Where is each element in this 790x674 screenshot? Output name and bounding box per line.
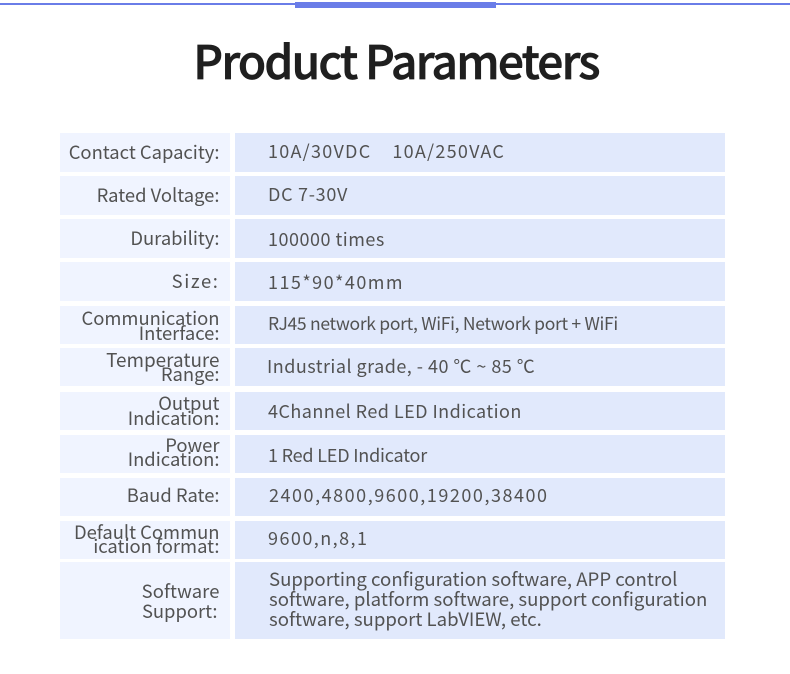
row: output indication: 4Channel Red LED Indication (268, 398, 522, 424)
row: communication interface (60, 305, 725, 346)
row: power indication (60, 432, 725, 473)
row: temperature range: Range: (161, 361, 220, 387)
row: default communication format: Default Commun (74, 519, 220, 545)
row: software support: Supporting configuration software, APP control (269, 565, 677, 592)
row: baud rate: Baud Rate: (127, 482, 220, 508)
row: default communication format: 9600,n,8,1 (268, 525, 368, 551)
row: rated voltage: DC 7-30V (268, 181, 348, 207)
row: output indication: Output (158, 390, 220, 416)
row: temperature range (60, 346, 725, 387)
row: default communication format (60, 519, 725, 559)
row: software support: software, platform software, support configuration (269, 585, 707, 612)
row: size: Size: (172, 268, 220, 294)
row: communication interface: Interface: (139, 320, 220, 346)
row: output indication (60, 390, 725, 431)
row: power indication: 1 Red LED Indicator (268, 442, 427, 468)
row: software support: software, support LabVIEW, etc. (269, 605, 542, 632)
row: software support: Support: (142, 598, 218, 624)
row: rated voltage: Rated Voltage: (97, 182, 220, 208)
row: power indication: Power (165, 432, 220, 458)
row: contact capacity (60, 133, 725, 172)
row: communication interface: RJ45 network port, WiFi, Network port + WiFi (268, 311, 618, 336)
row: power indication: Indication: (128, 446, 220, 472)
row: software support: Software (142, 578, 220, 604)
row: durability (60, 219, 725, 258)
row: default communication format: ication format: (93, 533, 220, 559)
row: temperature range: Temperature (106, 346, 220, 373)
row: software support (60, 562, 725, 639)
row: baud rate (60, 478, 725, 516)
top rule (0, 3, 790, 5)
top accent tab (295, 2, 496, 8)
row: contact capacity: 10A/30VDC 10A/250VAC (268, 138, 505, 164)
row: rated voltage (60, 176, 725, 215)
row: contact capacity: Contact Capacity: (69, 139, 220, 165)
row: size: 115*90*40mm (268, 269, 404, 295)
title: Product Parameters (193, 27, 599, 93)
row: temperature range: Industrial grade, - 40 ℃ ~ 85 ℃ (267, 353, 535, 379)
row: output indication: Indication: (128, 405, 220, 431)
row: durability: 100000 times (268, 226, 385, 252)
row: size (60, 262, 725, 301)
row: communication interface: Communication (82, 305, 220, 331)
row: durability: Durability: (130, 225, 220, 251)
row: baud rate: 2400,4800,9600,19200,38400 (269, 482, 549, 508)
